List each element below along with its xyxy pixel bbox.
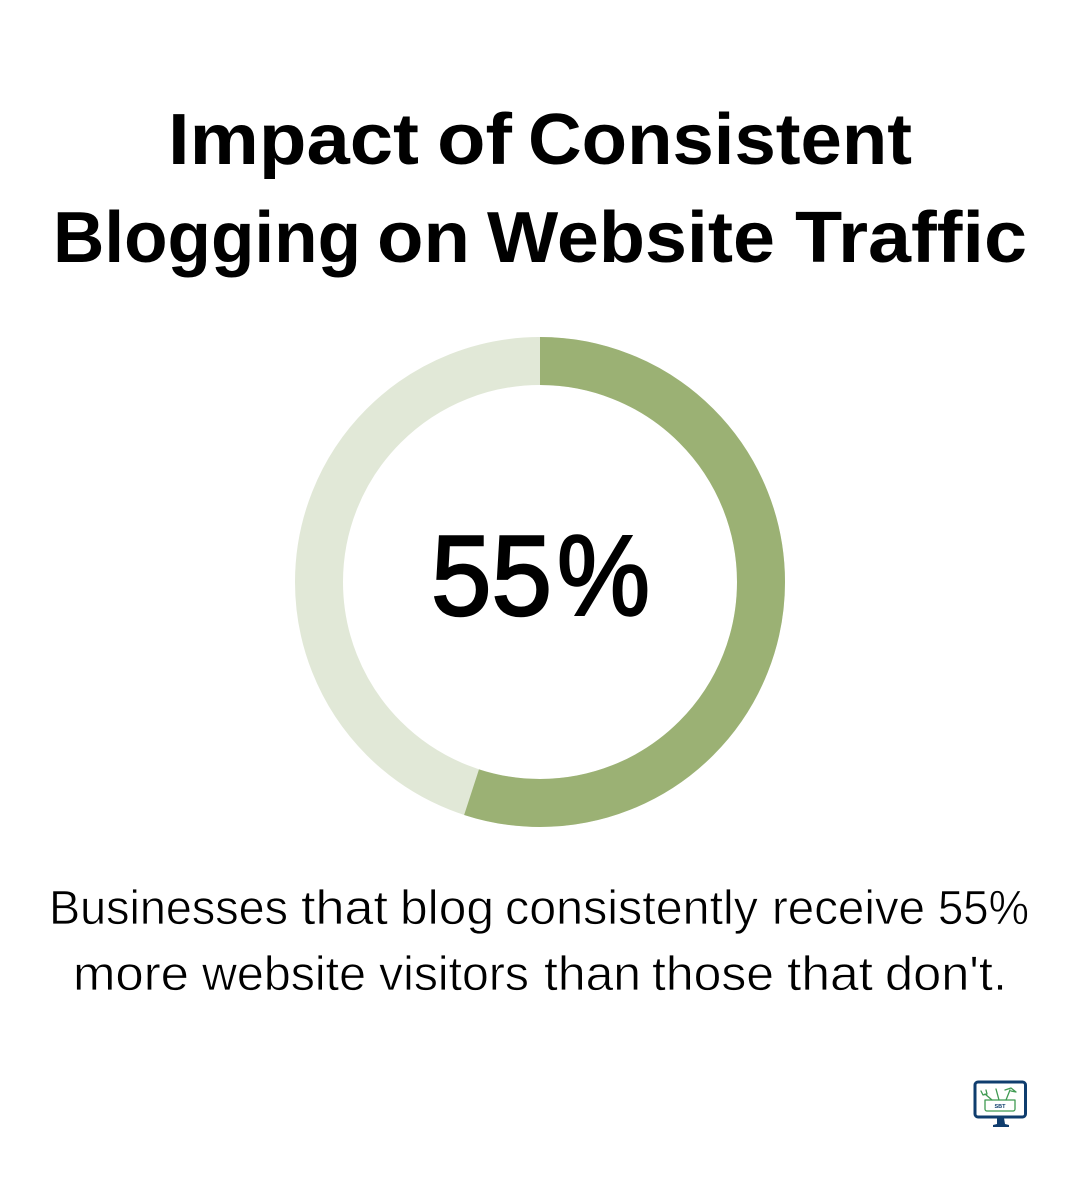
description text: that xyxy=(787,948,873,1001)
description text: blog xyxy=(400,882,494,935)
description text: those xyxy=(652,948,774,1001)
icon: monitor with toolbox logo xyxy=(975,1082,1026,1127)
description text: receive xyxy=(772,882,925,935)
description text xyxy=(49,882,1029,1001)
title: Traffic xyxy=(795,198,1027,278)
center percentage: % xyxy=(557,513,650,640)
title: on xyxy=(377,198,470,278)
description text: don't. xyxy=(885,948,1007,1001)
description text: than xyxy=(544,948,641,1001)
title: of xyxy=(437,100,513,180)
title: Impact xyxy=(168,100,419,180)
title: Blogging xyxy=(53,198,361,278)
description text: 55% xyxy=(938,882,1029,935)
donut chart: 55% xyxy=(319,361,761,803)
center percentage: 55 xyxy=(431,513,552,640)
description text: consistently xyxy=(505,882,758,935)
icon: monitor with toolbox logo: SBT xyxy=(994,1104,1006,1110)
title xyxy=(53,100,1027,278)
center percentage xyxy=(431,513,650,640)
description text: that xyxy=(301,882,388,935)
description text: visitors xyxy=(379,948,529,1001)
description text: more xyxy=(73,948,189,1001)
description text: website xyxy=(201,948,366,1001)
description text: Businesses xyxy=(49,882,288,935)
title: Website xyxy=(487,198,775,278)
title: Consistent xyxy=(528,100,912,180)
